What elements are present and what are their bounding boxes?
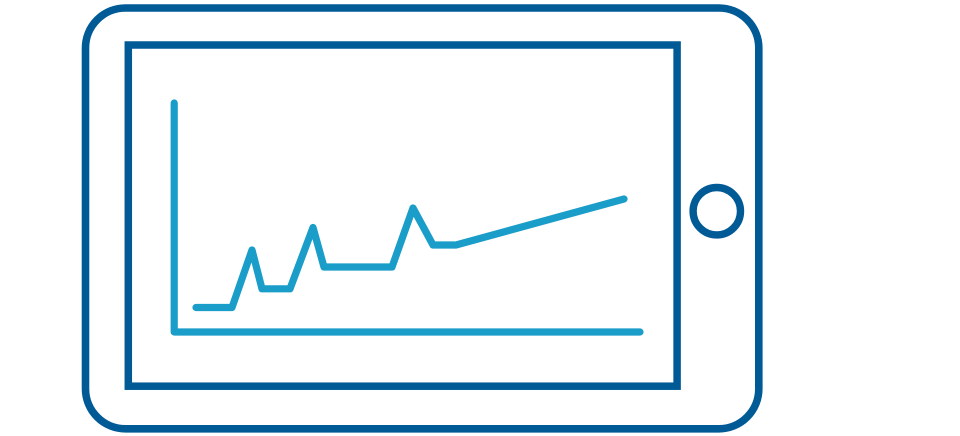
chart axes bbox=[174, 103, 640, 332]
tablet screen bbox=[128, 45, 677, 386]
icon: tablet body bbox=[86, 8, 759, 429]
chart line bbox=[196, 199, 624, 308]
icon: home button bbox=[693, 188, 740, 235]
